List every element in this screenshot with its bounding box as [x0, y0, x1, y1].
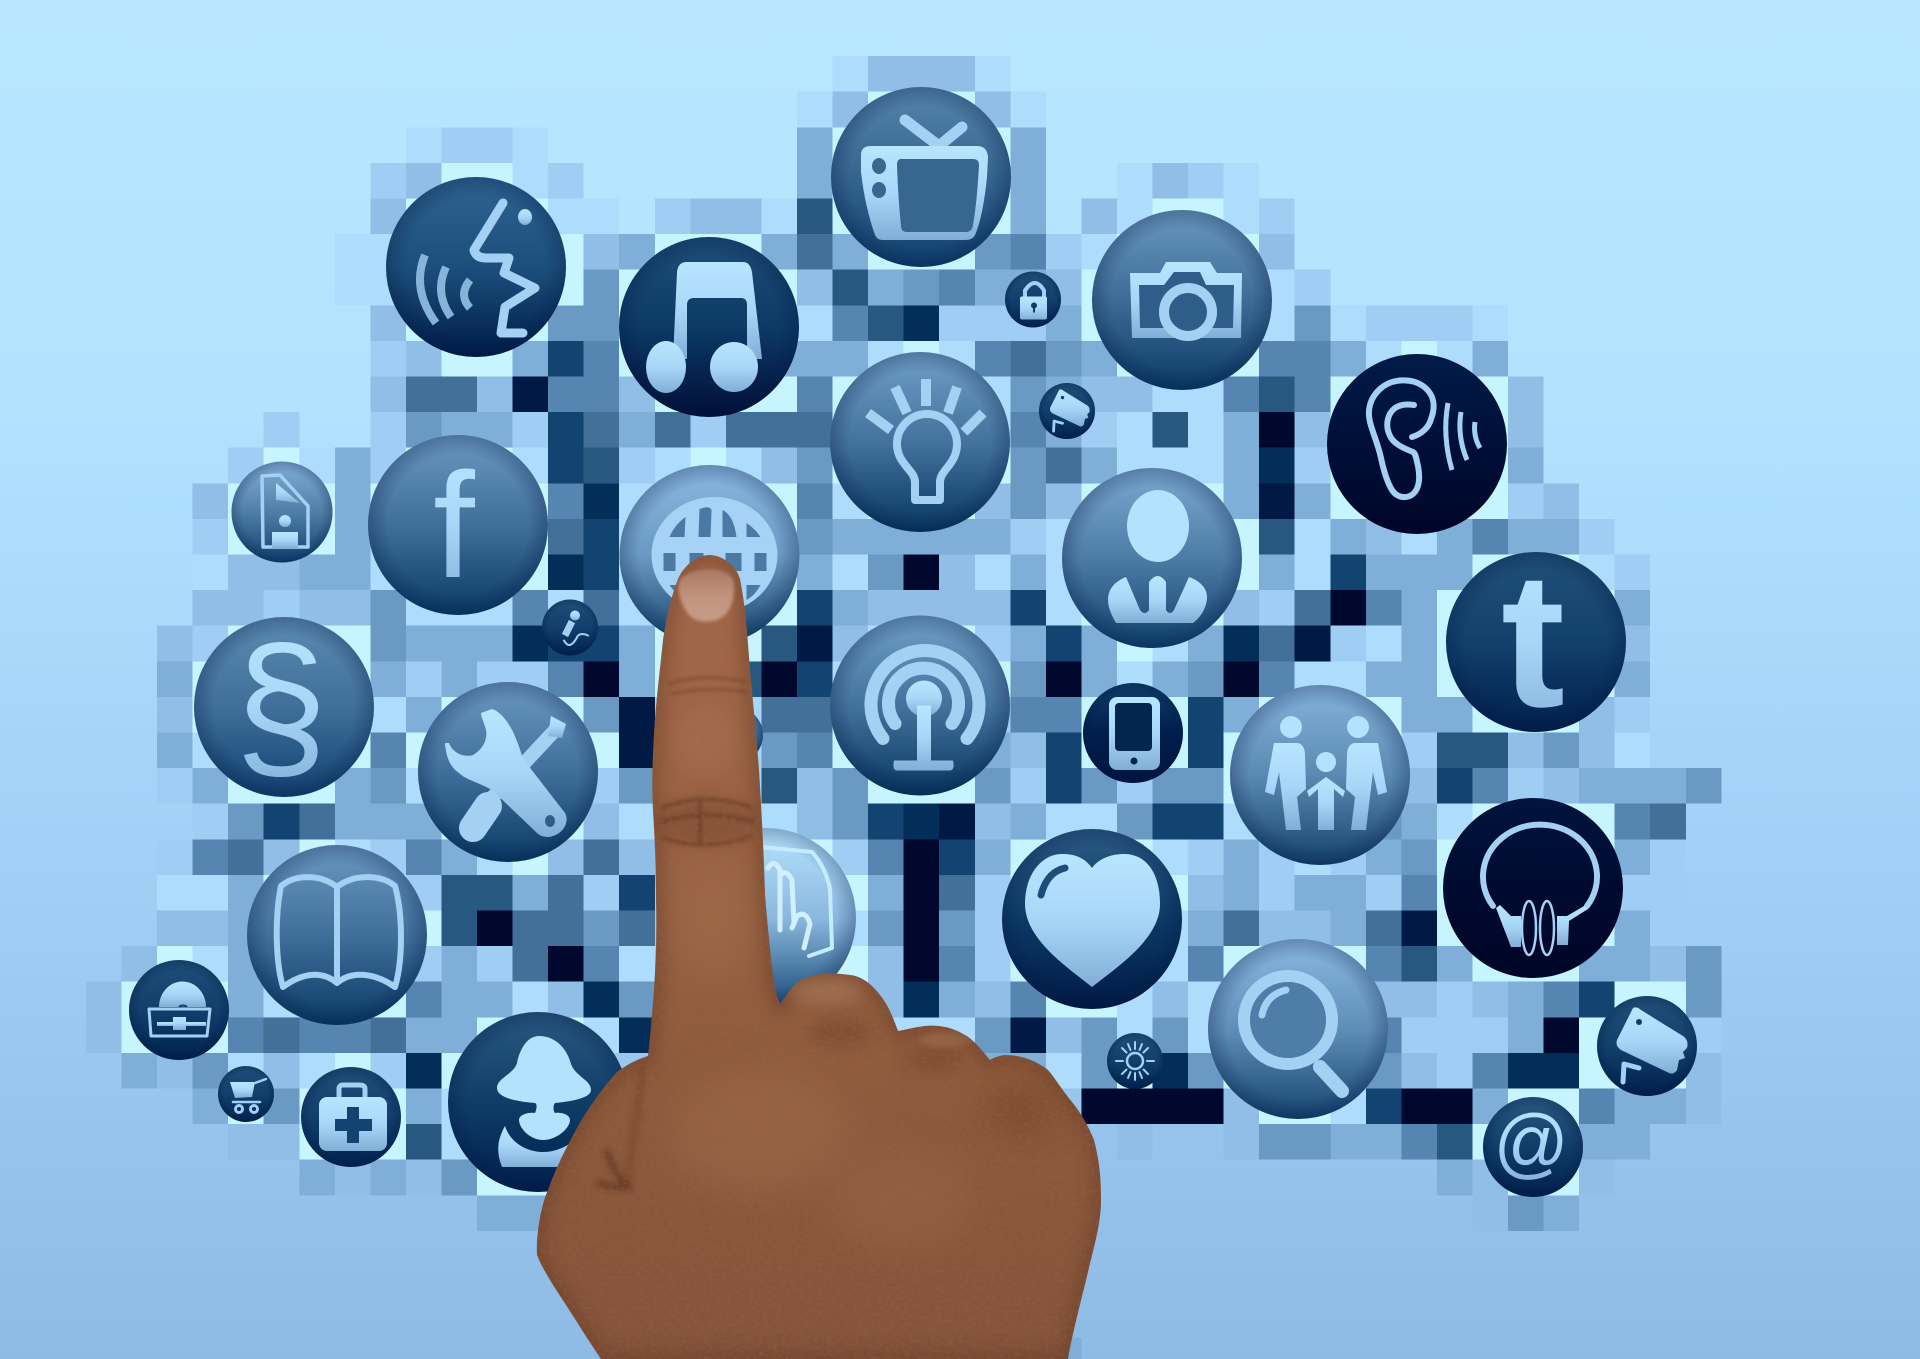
icon: hand palm partly hidden	[676, 828, 856, 1008]
icon: ear with sound	[1327, 354, 1507, 534]
icon: at sign	[1483, 1097, 1583, 1197]
icon: tumblr t	[1446, 532, 1626, 747]
icon: woman	[448, 1012, 628, 1192]
icon: information with cord	[542, 600, 598, 656]
fingernail	[678, 570, 734, 622]
icon: padlock	[1005, 272, 1061, 328]
icon: shopping cart	[218, 1066, 274, 1122]
icon: family	[1230, 685, 1410, 865]
icon: sun	[1107, 1033, 1163, 1089]
icon: light bulb	[830, 352, 1010, 532]
icon: disc box	[129, 960, 229, 1060]
icon: facebook f	[368, 435, 548, 615]
icon: globe	[620, 465, 800, 645]
icon: open book	[247, 845, 427, 1025]
icon: small security camera	[1039, 383, 1095, 439]
icon: facebook f: f	[433, 441, 475, 609]
icon: speaking face	[386, 177, 566, 357]
icon: medical kit	[301, 1067, 401, 1167]
icon: security camera	[1597, 996, 1697, 1096]
icon: television	[831, 87, 1011, 267]
icon: at sign: @	[1493, 1099, 1569, 1186]
icon: paragraph sign: §	[235, 613, 327, 799]
icon: camera	[1092, 210, 1272, 390]
icon: music note	[619, 237, 799, 417]
icon: wireless broadcast	[830, 616, 1010, 796]
hand with pointing finger	[530, 550, 1110, 1359]
icon: person	[1062, 468, 1242, 648]
icon: heart	[1002, 829, 1182, 1009]
icon: magnifying glass	[1208, 939, 1388, 1119]
icon: wrench and screwdriver	[418, 682, 598, 862]
icon: smartphone	[1083, 683, 1183, 783]
icon: person with document	[232, 462, 332, 562]
icon: paragraph sign	[194, 613, 374, 799]
icon: small circle hidden behind finger	[707, 707, 763, 763]
icon: headphones	[1443, 798, 1623, 978]
icon: tumblr t: t	[1501, 532, 1565, 747]
